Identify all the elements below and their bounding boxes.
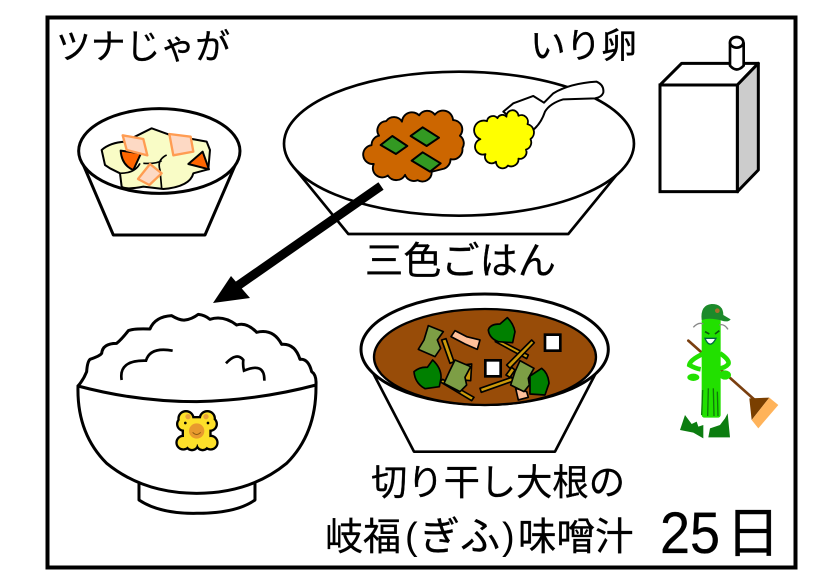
title: 切り干し大根の: 切り干し大根の	[371, 462, 625, 503]
shredded daikon	[440, 339, 534, 401]
date: 25日: 25	[660, 501, 720, 566]
icon: tuna potato bowl	[79, 109, 240, 235]
title: いり卵: いり卵	[530, 27, 637, 66]
date: 25日	[660, 501, 780, 566]
aburaage pieces	[451, 331, 528, 400]
bear mark	[178, 412, 216, 449]
title: 岐福(ぎふ)味噌汁: (	[405, 516, 418, 558]
icon: rice bowl	[78, 314, 316, 513]
title: ツナじゃが: ツナじゃが	[56, 28, 230, 67]
title: 三色ごはん: 三色ごはん	[365, 241, 556, 283]
character: green bean with broom	[680, 304, 778, 438]
face	[693, 323, 728, 329]
title: 岐福(ぎふ)味噌汁: )	[502, 516, 515, 558]
cap	[701, 304, 731, 321]
wakame	[414, 318, 549, 395]
title: 岐福(ぎふ)味噌汁: 味噌汁	[518, 516, 634, 559]
scrambled egg	[474, 110, 534, 168]
feet	[680, 415, 703, 438]
date: 25日: 日	[726, 504, 780, 564]
arrow	[213, 186, 381, 303]
tofu	[485, 360, 501, 376]
icon: big bowl of three-colour rice	[284, 72, 634, 234]
broom	[688, 341, 778, 428]
icon: miso soup bowl	[361, 294, 608, 452]
fork	[503, 82, 603, 133]
arms	[689, 353, 729, 369]
icon: milk carton	[660, 37, 758, 192]
title: 岐福(ぎふ)味噌汁: ぎふ	[420, 515, 500, 559]
greens	[418, 326, 534, 392]
title: 岐福(ぎふ)味噌汁: 岐福	[325, 517, 401, 559]
title: 岐福(ぎふ)味噌汁	[325, 515, 634, 559]
body	[702, 318, 721, 418]
soboro: brown minced meat with green peas	[363, 111, 464, 181]
